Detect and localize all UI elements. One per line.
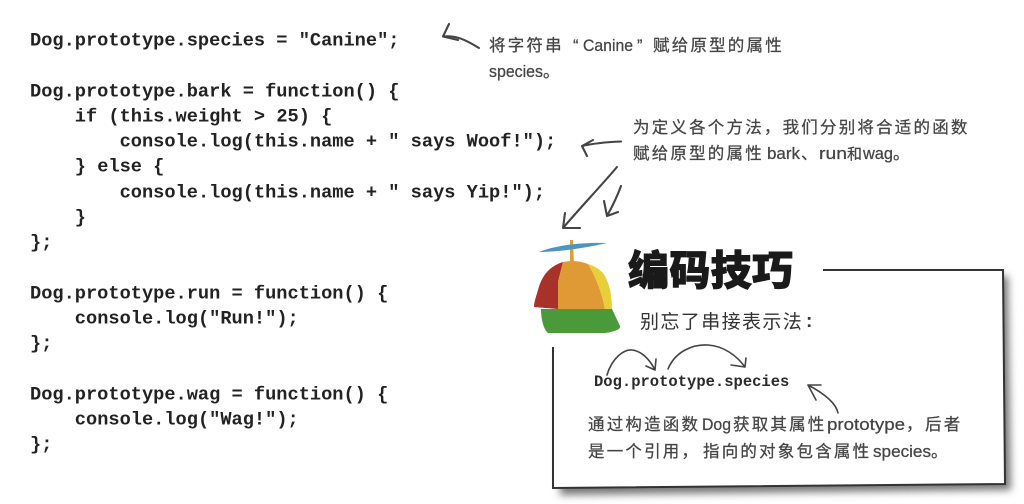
arrow: to species: [808, 385, 838, 413]
annotation: species assignment: 。: [543, 63, 560, 81]
annotation: species assignment: 将字符串: [489, 36, 564, 55]
icon: propeller beanie hat: [534, 240, 620, 333]
tip explanation text: prototype: [827, 416, 905, 434]
code listing: Dog.prototype.bark = function() {: [30, 80, 399, 102]
code listing: console.log("Wag!");: [75, 408, 299, 430]
arrow: to run method: [563, 167, 617, 228]
tip explanation text: 指向的对象包含属性: [703, 442, 871, 461]
code listing: };: [30, 332, 52, 354]
arrow: to wag method: [604, 186, 621, 216]
annotation: method assignment: 和: [847, 146, 862, 163]
panel shadow: [560, 276, 1011, 495]
tip intro text: 别忘了串接表示法: [640, 311, 803, 333]
annotation: species assignment: “: [573, 37, 578, 55]
code listing: console.log(this.name + " says Woof!");: [120, 130, 556, 152]
annotation: species assignment: 赋给原型的属性: [653, 36, 784, 55]
arrow: to bark method: [582, 140, 621, 156]
code listing: }: [75, 206, 86, 228]
tip explanation text: species: [873, 443, 931, 461]
code listing: } else {: [75, 156, 164, 178]
tip explanation text: Dog: [702, 416, 731, 434]
header white patch: [528, 232, 823, 347]
code listing: [30, 30, 556, 456]
arrow: Dog to prototype: [607, 350, 656, 375]
heading: coding tips: 编码技巧: [628, 248, 793, 294]
tip explanation text: 。: [931, 443, 948, 461]
tip explanation text: 通过构造函数: [588, 415, 700, 434]
code listing: console.log("Run!");: [75, 308, 299, 330]
code listing: Dog.prototype.species = "Canine";: [30, 30, 399, 52]
annotation: method assignment: run: [819, 145, 847, 163]
tip explanation text: 是一个引用，: [588, 442, 700, 461]
chained code expression: Dog.prototype.species: [594, 373, 789, 391]
annotation: method assignment: 。: [893, 145, 910, 163]
annotation: method assignment: 为定义各个方法，我们分别将合适的函数: [633, 118, 970, 137]
tip explanation text: ，: [906, 416, 922, 434]
annotation: species assignment: ”: [637, 37, 642, 55]
code listing: };: [30, 232, 52, 254]
arrow: prototype to species: [668, 345, 746, 369]
code listing: if (this.weight > 25) {: [75, 106, 332, 128]
annotation: method assignment: [633, 118, 970, 163]
annotation: species assignment: species: [489, 63, 543, 81]
code listing: console.log(this.name + " says Yip!");: [120, 182, 545, 204]
annotation: species assignment: [489, 36, 784, 81]
code listing: Dog.prototype.wag = function() {: [30, 384, 388, 406]
annotation: method assignment: wag: [862, 145, 893, 163]
panel box: [553, 270, 1005, 488]
annotation: species assignment: Canine: [583, 37, 633, 55]
tip explanation text: 后者: [925, 415, 962, 434]
annotation: method assignment: 、: [801, 145, 818, 163]
tip explanation text: 获取其属性: [733, 415, 826, 434]
tip intro text: :: [806, 311, 812, 332]
arrow: to species line: [443, 24, 479, 48]
code listing: Dog.prototype.run = function() {: [30, 282, 388, 304]
annotation: method assignment: 赋给原型的属性: [633, 144, 764, 163]
tip explanation text: [588, 415, 962, 461]
panel: coding tip: [528, 232, 1011, 495]
code listing: };: [30, 434, 52, 456]
annotation: method assignment: bark: [767, 145, 801, 163]
